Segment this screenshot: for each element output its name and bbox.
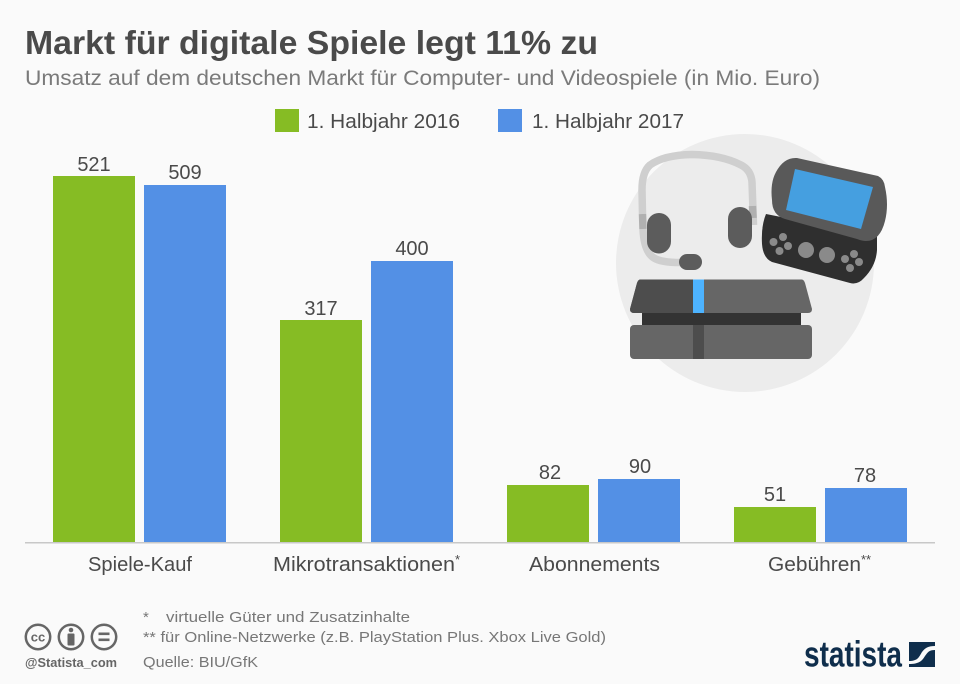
icon: game console [630,280,812,359]
group: Spiele-Kauf: Spiele-Kauf [88,554,192,576]
handle: @Statista_com [25,656,117,670]
group: Gebühren: Gebühren [768,554,861,576]
title: Markt für digitale Spiele legt 11% zu [25,24,598,61]
legend item: 2017: 1. Halbjahr 2017 [532,110,684,133]
bar chart [25,154,935,576]
group: Gebühren: 78 [854,465,876,487]
legend item: 2016: 1. Halbjahr 2016 [307,110,460,133]
logo: statista: statista [804,634,903,674]
group: Mikrotransaktionen: * [455,552,460,567]
icon: handheld console [762,158,887,283]
group: Abonnements: 82 [539,462,561,484]
group: Mikrotransaktionen [273,238,460,576]
group: Gebühren: 51 [764,484,786,506]
group: Abonnements: 90 [629,456,651,478]
group: Mikrotransaktionen: Mikrotransaktionen [273,554,455,576]
background circle [616,134,874,392]
group: Spiele-Kauf: 521 [77,154,111,176]
group: Mikrotransaktionen: 317 [304,298,338,320]
footnotes: Quelle: BIU/GfK [143,654,258,671]
illustration: gaming devices [616,134,887,392]
icon: statista mark [909,642,935,667]
group: Abonnements: Abonnements [529,554,660,576]
subtitle: Umsatz auf dem deutschen Markt für Computer- und Videospiele (in Mio. Euro) [25,66,820,90]
group: Spiele-Kauf: 509 [168,162,202,184]
footnotes: ** für Online-Netzwerke (z.B. PlayStation Plus. Xbox Live Gold) [143,629,606,646]
icons: creative commons [26,625,116,649]
group: Abonnements [507,456,680,576]
footnotes: virtuelle Güter und Zusatzinhalte [166,609,410,626]
icons: creative commons: cc [31,630,45,644]
footnotes: * [143,609,149,626]
group: Gebühren [734,465,907,576]
group: Mikrotransaktionen: 400 [395,238,429,260]
footnotes [143,609,606,671]
group: Spiele-Kauf [53,154,226,576]
legend [275,109,684,133]
group: Gebühren: ** [861,552,871,567]
icon: headset [642,154,754,270]
